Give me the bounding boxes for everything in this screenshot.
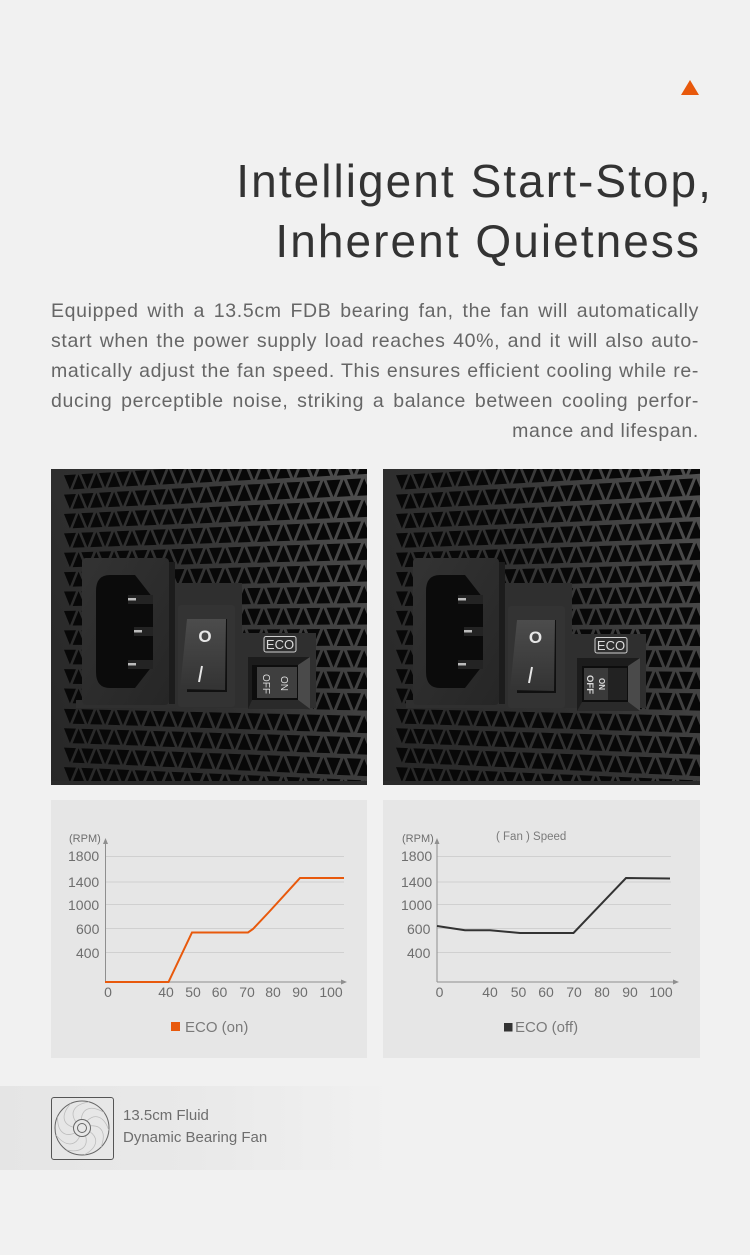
axis labels: 400 bbox=[407, 945, 431, 961]
chart: fan speed with ECO off bbox=[383, 800, 700, 1058]
ECO label: ECO bbox=[597, 638, 625, 653]
panel: photo of ECO switch on bbox=[51, 469, 367, 785]
fan caption: 13.5cm Fluid bbox=[123, 1107, 209, 1124]
description text block: start when the power supply load reaches 40%, and it will also auto- bbox=[51, 330, 699, 352]
axis labels: 60 bbox=[538, 984, 554, 1000]
axis labels: 70 bbox=[239, 984, 255, 1000]
axis labels: 1000 bbox=[401, 897, 432, 913]
panel: fan feature strip bbox=[0, 1086, 390, 1170]
axis labels: 600 bbox=[407, 921, 431, 937]
axis labels: 0 bbox=[436, 984, 444, 1000]
ECO on speed curve bbox=[105, 878, 344, 982]
icon: orange triangle marker bbox=[681, 80, 699, 95]
axis labels: 70 bbox=[566, 984, 582, 1000]
fan caption bbox=[123, 1107, 267, 1146]
axis labels: 40 bbox=[158, 984, 174, 1000]
axis labels: 400 bbox=[76, 945, 100, 961]
axis labels: 100 bbox=[319, 984, 343, 1000]
ECO switch in on position: OFF bbox=[260, 674, 271, 694]
axis labels: 90 bbox=[622, 984, 638, 1000]
axis labels: 50 bbox=[511, 984, 526, 1000]
axis labels: 40 bbox=[482, 984, 498, 1000]
panel: photo of ECO switch off bbox=[383, 469, 700, 785]
power rocker switch bbox=[178, 605, 235, 707]
power socket bbox=[413, 558, 499, 705]
axis labels: 60 bbox=[212, 984, 227, 1000]
ECO switch in on position bbox=[248, 657, 310, 709]
icon: fan bbox=[51, 1097, 114, 1160]
axis labels: 1400 bbox=[68, 874, 99, 890]
ECO switch in on position: ON bbox=[278, 676, 289, 691]
axis labels: 600 bbox=[76, 921, 100, 937]
power rocker switch: O bbox=[529, 628, 542, 647]
chart title: ( Fan ) Speed bbox=[496, 831, 566, 843]
description text block: mance and lifespan. bbox=[512, 420, 699, 442]
axis labels: 1800 bbox=[401, 848, 432, 864]
power rocker switch: O bbox=[198, 627, 212, 646]
title: Intelligent Start-Stop, bbox=[236, 155, 713, 207]
title bbox=[236, 155, 713, 267]
axis labels: 0 bbox=[104, 984, 112, 1000]
description text block bbox=[51, 300, 699, 442]
ECO label: ECO bbox=[266, 637, 294, 652]
description text block: ducing perceptible noise, striking a balance between cooling perfor- bbox=[51, 390, 699, 412]
description text block: Equipped with a 13.5cm FDB bearing fan, the fan will automatically bbox=[51, 300, 699, 322]
legend: ECO on: ECO (on) bbox=[185, 1019, 248, 1036]
fan caption: Dynamic Bearing Fan bbox=[123, 1129, 267, 1146]
axis labels: 1400 bbox=[401, 874, 432, 890]
power rocker switch bbox=[508, 606, 565, 708]
axis labels bbox=[68, 833, 343, 1000]
axis labels bbox=[401, 833, 673, 1000]
axis labels: (RPM) bbox=[402, 833, 434, 845]
axis labels: 80 bbox=[594, 984, 610, 1000]
axis labels: 1800 bbox=[68, 848, 99, 864]
power socket bbox=[82, 558, 169, 705]
legend: ECO off: ECO (off) bbox=[515, 1019, 578, 1036]
description text block: matically adjust the fan speed. This ensures efficient cooling while re- bbox=[51, 360, 699, 382]
ECO switch in off position: ON bbox=[597, 678, 606, 690]
chart: fan speed with ECO on bbox=[51, 800, 367, 1058]
ECO off speed curve bbox=[437, 878, 670, 933]
axis labels: (RPM) bbox=[69, 833, 101, 845]
ECO switch in off position bbox=[577, 658, 640, 711]
axis labels: 100 bbox=[649, 984, 673, 1000]
axis labels: 80 bbox=[265, 984, 281, 1000]
axis labels: 90 bbox=[292, 984, 308, 1000]
title: Inherent Quietness bbox=[275, 215, 701, 267]
axis labels: 1000 bbox=[68, 897, 99, 913]
axis labels: 50 bbox=[185, 984, 201, 1000]
ECO switch in off position: OFF bbox=[584, 675, 595, 694]
